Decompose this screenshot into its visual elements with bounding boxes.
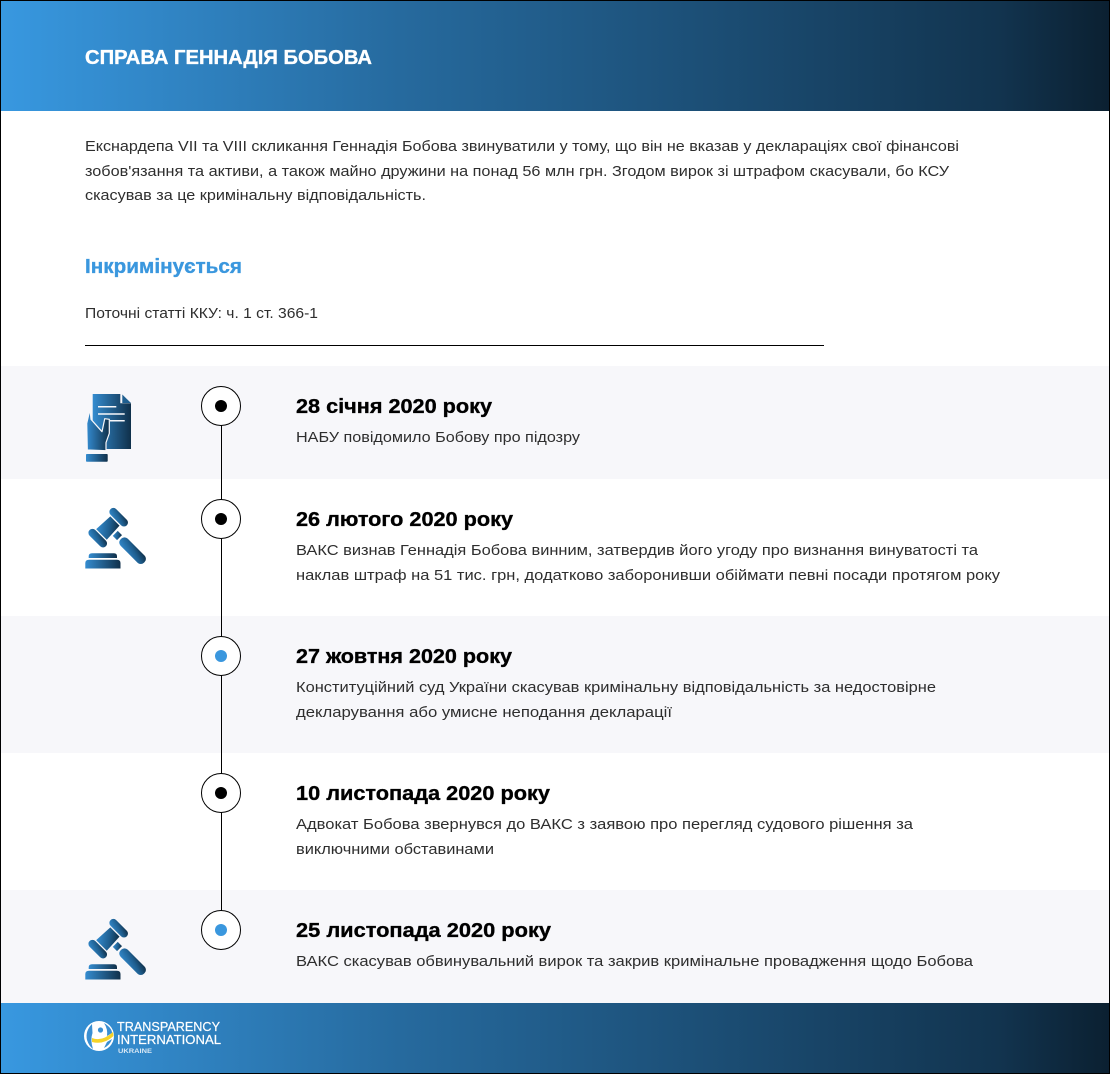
timeline marker 4 bbox=[202, 774, 240, 812]
event 3: 27 жовтня 2020 року bbox=[296, 646, 513, 668]
timeline axis bbox=[220, 425, 222, 911]
event 3: декларування або умисне неподання декларації bbox=[296, 705, 672, 721]
row background 5 bbox=[1, 890, 1109, 1003]
icon: gavel 2 bbox=[85, 917, 157, 987]
timeline marker 5 bbox=[202, 910, 240, 950]
event 4 bbox=[296, 783, 914, 858]
logo: Transparency International Ukraine: TRANSPARENCY bbox=[117, 1020, 221, 1034]
event 4: Адвокат Бобова звернувся до ВАКС з заявою про перегляд судового рішення за bbox=[296, 817, 914, 833]
event 2: 26 лютого 2020 року bbox=[296, 509, 514, 531]
event 2: ВАКС визнав Геннадія Бобова винним, затвердив його угоду про визнання винуватості та bbox=[296, 543, 979, 559]
intro paragraph: скасував за це кримінальну відповідальність. bbox=[85, 188, 426, 204]
heading: incriminated: Інкримінується bbox=[85, 256, 242, 278]
timeline marker 3 bbox=[202, 636, 240, 676]
timeline marker 2 bbox=[202, 500, 240, 538]
event 4: виключними обставинами bbox=[296, 842, 494, 858]
icon: gavel 1 bbox=[85, 506, 157, 576]
event 1: 28 січня 2020 року bbox=[296, 396, 493, 418]
event 5 bbox=[296, 920, 974, 970]
intro paragraph: зобов'язання та активи, а також майно дружини на понад 56 млн грн. Згодом вирок зі штрафом скасували, бо КСУ bbox=[85, 164, 950, 180]
logo: Transparency International Ukraine: UKRAINE bbox=[118, 1048, 153, 1055]
event 1: НАБУ повідомило Бобову про підозру bbox=[296, 430, 581, 446]
event 3 bbox=[296, 646, 936, 721]
logo: Transparency International Ukraine: INTERNATIONAL bbox=[117, 1033, 221, 1047]
intro paragraph bbox=[85, 139, 959, 204]
icon: hand holding document bbox=[86, 394, 131, 462]
event 5: 25 листопада 2020 року bbox=[296, 920, 552, 942]
title: СПРАВА ГЕННАДІЯ БОБОВА bbox=[85, 47, 372, 69]
logo: Transparency International Ukraine bbox=[84, 1020, 221, 1055]
event 4: 10 листопада 2020 року bbox=[296, 783, 551, 805]
event 2 bbox=[296, 509, 1001, 584]
current articles text: Поточні статті ККУ: ч. 1 ст. 366-1 bbox=[85, 306, 318, 322]
timeline marker 1 bbox=[202, 386, 240, 426]
event 1 bbox=[296, 396, 581, 446]
footer banner bbox=[1, 1003, 1109, 1073]
header banner bbox=[1, 1, 1109, 111]
intro paragraph: Екснардепа VII та VIII скликання Геннадія Бобова звинуватили у тому, що він не вказав у деклараціях свої фінансові bbox=[85, 139, 959, 155]
event 2: наклав штраф на 51 тис. грн, додатково заборонивши обіймати певні посади протягом року bbox=[296, 568, 1001, 584]
row background 3 bbox=[1, 616, 1109, 753]
event 5: ВАКС скасував обвинувальний вирок та закрив кримінальне провадження щодо Бобова bbox=[296, 954, 974, 970]
event 3: Конституційний суд України скасував кримінальну відповідальність за недостовірне bbox=[296, 680, 936, 696]
row background 1 bbox=[1, 366, 1109, 479]
